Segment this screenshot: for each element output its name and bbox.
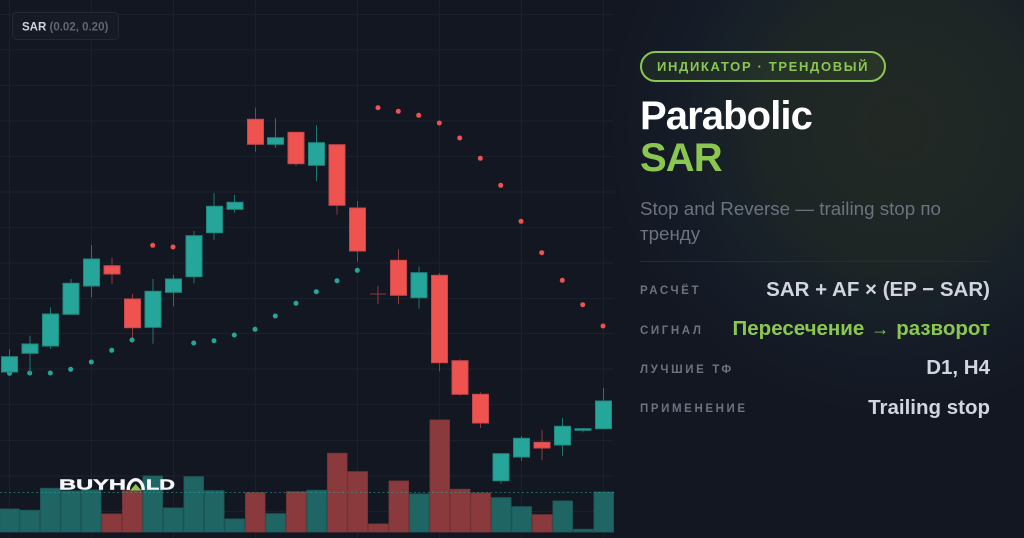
info panel bbox=[614, 0, 1024, 538]
title: SAR bbox=[640, 136, 722, 180]
row: signal: → bbox=[871, 319, 889, 339]
title bbox=[640, 94, 812, 180]
row: usage: Trailing stop bbox=[868, 396, 990, 418]
row: calculation: РАСЧЁТ bbox=[640, 285, 701, 297]
subtitle: Stop and Reverse — trailing stop по bbox=[640, 198, 941, 219]
logo: BUYHOLD bbox=[59, 477, 175, 494]
volume bars bbox=[0, 420, 613, 532]
row: calculation: SAR + AF × (EP − SAR) bbox=[766, 278, 990, 301]
logo: BUYHOLD: BUYH bbox=[59, 477, 126, 494]
candlesticks bbox=[2, 108, 612, 484]
row: best timeframes: D1, H4 bbox=[926, 356, 990, 379]
indicator legend badge: SAR (0.02, 0.20) bbox=[22, 22, 108, 34]
indicator legend badge bbox=[12, 12, 118, 40]
row: usage: ПРИМЕНЕНИЕ bbox=[640, 403, 748, 415]
row: best timeframes: ЛУЧШИЕ ТФ bbox=[640, 364, 734, 376]
subtitle bbox=[640, 198, 941, 244]
chart panel bbox=[0, 0, 614, 538]
divider bbox=[640, 261, 990, 262]
subtitle: тренду bbox=[640, 223, 700, 244]
SAR dots: bullish bbox=[7, 268, 360, 376]
row: signal: СИГНАЛ bbox=[640, 325, 704, 337]
SAR dots: bearish bbox=[150, 105, 605, 328]
tag text: ИНДИКАТОР · ТРЕНДОВЫЙ bbox=[657, 59, 869, 74]
SAR dots: bullish on candles bbox=[130, 338, 134, 342]
row: calculation bbox=[640, 278, 990, 301]
row: best timeframes bbox=[640, 356, 990, 379]
row: signal: Пересечение разворот bbox=[733, 317, 990, 340]
row: usage bbox=[640, 396, 990, 418]
background glow bbox=[607, 0, 1024, 417]
title: Parabolic bbox=[640, 94, 812, 138]
logo: BUYHOLD: LD bbox=[146, 477, 175, 494]
tag pill bbox=[640, 51, 886, 82]
